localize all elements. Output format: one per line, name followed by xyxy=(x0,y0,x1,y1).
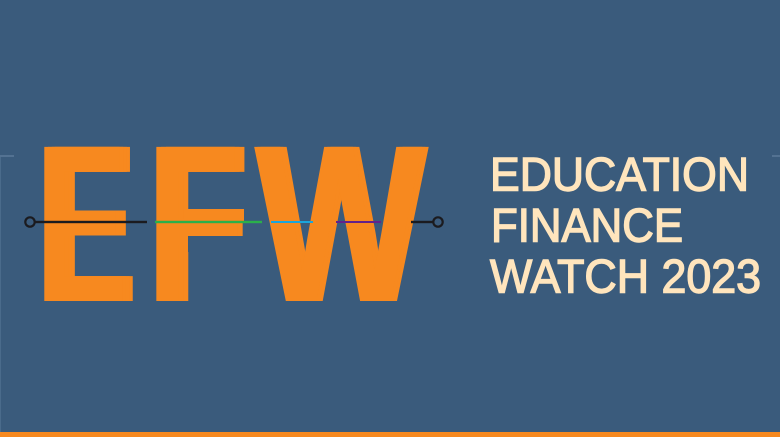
letter F: F xyxy=(146,99,240,349)
blue segment xyxy=(271,221,313,223)
frame tick right xyxy=(772,155,780,157)
title line 1: EDUCATION xyxy=(490,148,749,200)
letter W: W xyxy=(254,99,422,349)
title line 2: FINANCE xyxy=(491,198,683,252)
title line 3: WATCH 2023 xyxy=(490,250,761,302)
letter E: E xyxy=(35,99,128,349)
right end circle xyxy=(433,217,443,227)
green segment xyxy=(155,221,262,223)
segmented timeline line across logo xyxy=(25,217,443,227)
frame edge left xyxy=(0,157,2,432)
left end circle xyxy=(25,217,35,227)
black segment right xyxy=(411,221,434,223)
black segment left xyxy=(34,221,147,223)
frame tick left xyxy=(0,155,14,157)
orange bottom band xyxy=(0,432,780,437)
EFW logo letters xyxy=(35,99,429,349)
purple segment xyxy=(336,221,381,223)
title xyxy=(490,148,761,302)
